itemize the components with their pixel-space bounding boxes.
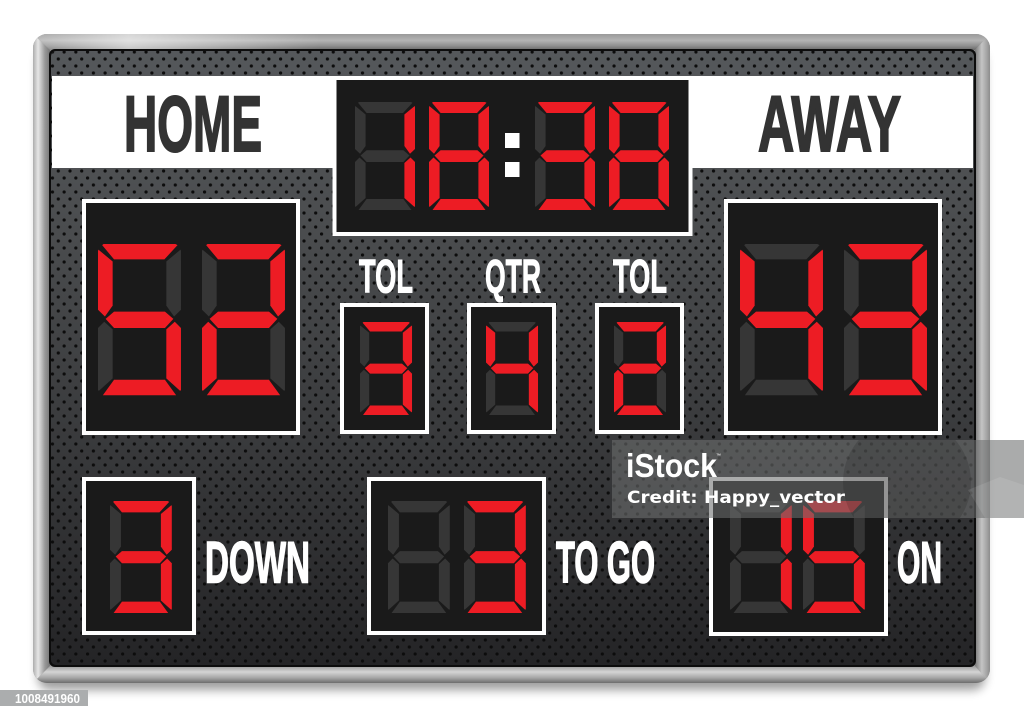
board background — [49, 49, 976, 667]
watermark panel — [612, 440, 1024, 518]
watermark credit: Credit: Happy_vector — [627, 488, 846, 508]
digit: clock 8 second — [609, 102, 669, 210]
digit: home 2 — [202, 244, 285, 395]
panel: quarter value — [469, 305, 554, 432]
panel: home timeouts value — [342, 305, 427, 432]
panel: ball on value — [711, 479, 886, 634]
digit: home 5 — [98, 244, 181, 395]
digit: blank — [388, 501, 450, 613]
digit: 3 — [360, 322, 412, 415]
panel: game clock — [334, 78, 690, 234]
digit: 5 — [803, 501, 865, 613]
panel: home score — [84, 201, 298, 433]
label: home timeouts: TOL — [359, 250, 413, 302]
digit: 4 — [486, 322, 538, 415]
heading: home: HOME — [124, 79, 262, 168]
digit: 2 — [614, 322, 666, 415]
digit: 3 — [464, 501, 526, 613]
image id tag — [0, 690, 88, 706]
label: down: DOWN — [205, 530, 310, 596]
label: away timeouts: TOL — [613, 250, 667, 302]
image id tag: 1008491960 — [15, 692, 80, 706]
heading: away: AWAY — [758, 79, 901, 168]
panel: down value — [84, 479, 194, 633]
label: quarter: QTR — [485, 250, 541, 302]
label: to go: TO GO — [556, 530, 655, 596]
digit: clock 3 — [535, 102, 595, 210]
panel: to go value — [369, 479, 544, 633]
watermark trademark: ™ — [716, 453, 721, 459]
label: on: ON — [897, 530, 942, 596]
digit: 1 — [730, 501, 792, 613]
digit: 3 — [110, 501, 172, 613]
digit: away 4 — [740, 244, 823, 395]
panel: away timeouts value — [597, 305, 682, 432]
digit: clock 8 — [429, 102, 489, 210]
watermark logo: iStock — [626, 447, 718, 484]
digit: away 3 — [844, 244, 927, 395]
clock colon — [505, 133, 520, 177]
digit: clock 1 — [355, 102, 415, 210]
header band — [52, 76, 973, 168]
panel: away score — [726, 201, 940, 433]
